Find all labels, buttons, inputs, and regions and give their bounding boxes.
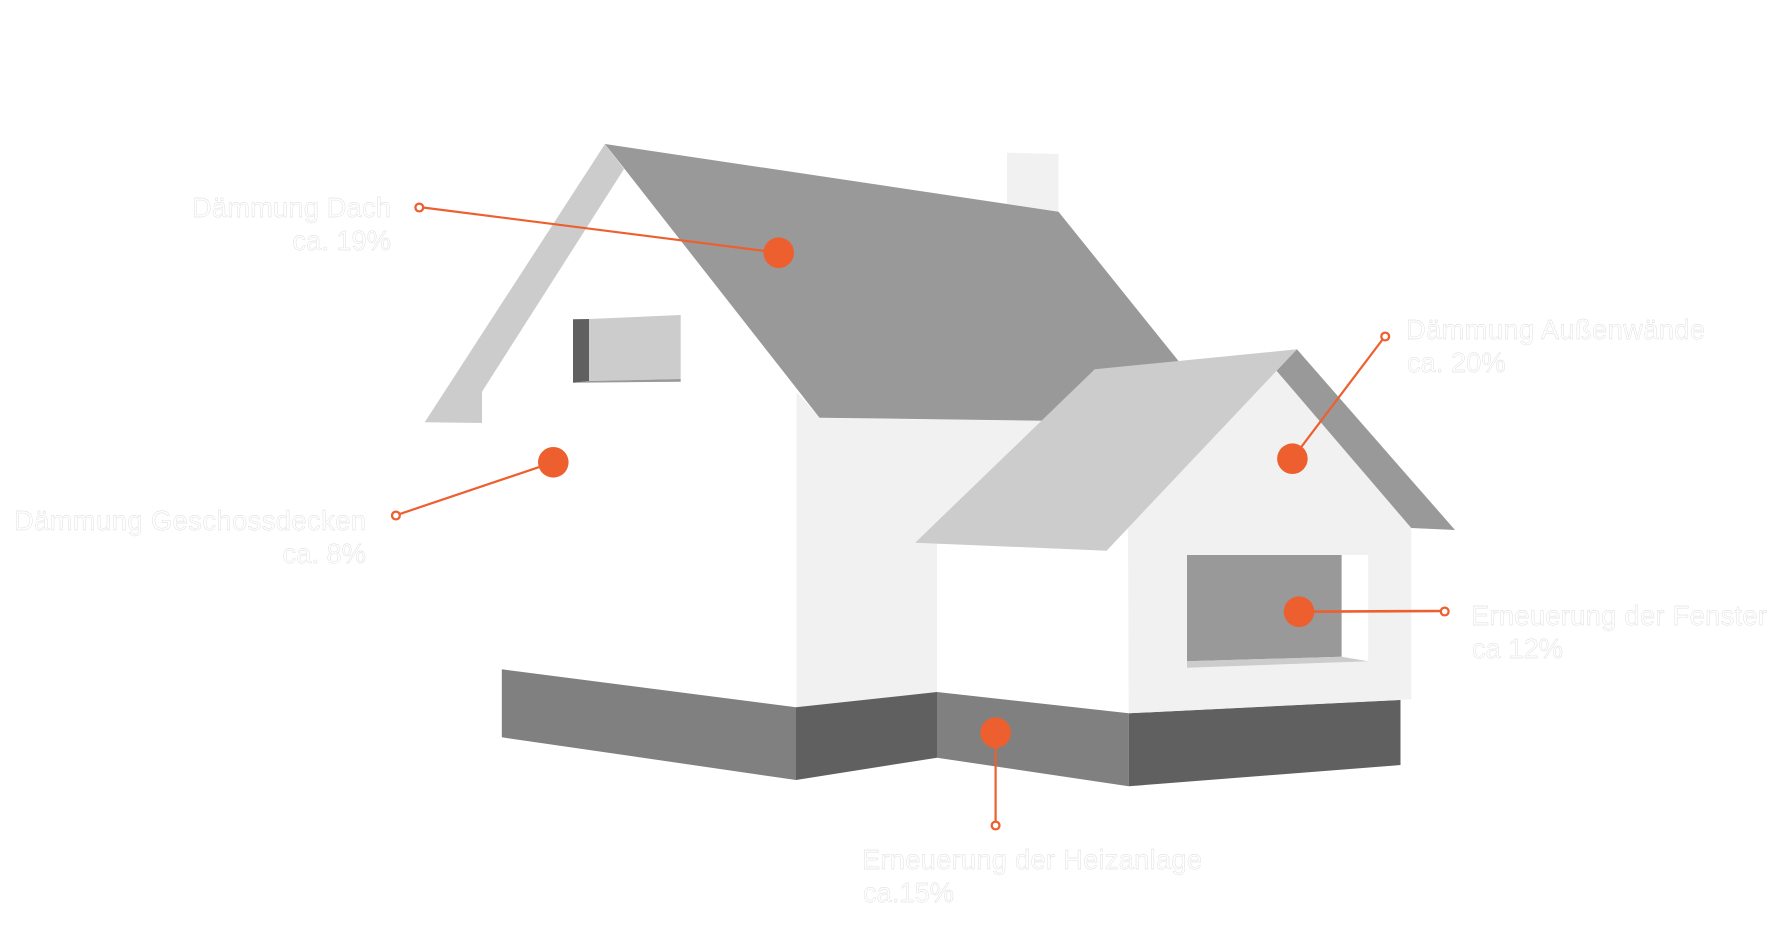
house illustration [425,144,1455,786]
callout: windows: ca 12% [1472,633,1563,664]
chimney [1007,153,1058,212]
callout: exterior wall insulation: ca. 20% [1407,347,1506,378]
callout: roof insulation [192,192,794,268]
callout: windows [1284,596,1767,664]
callout: roof insulation: ca. 19% [292,225,391,256]
callout: roof insulation: Dämmung Dach [192,192,391,223]
large window [1187,555,1368,668]
main roof gable edge [425,144,624,423]
extension roof [915,349,1297,551]
callout: exterior wall insulation [1277,314,1705,474]
callout: heating system [862,717,1202,908]
callout: heating system: ca.15% [863,877,954,908]
callout: floor ceiling insulation: ca. 8% [283,538,366,569]
callout: windows: Erneuerung der Fenster [1471,600,1767,631]
gable window [573,315,681,383]
callout: heating system: Erneuerung der Heizanlage [862,844,1202,875]
callout: floor ceiling insulation: Dämmung Geschossdecken [14,505,366,536]
callout: floor ceiling insulation [14,447,569,569]
extension roof gable edge [1276,349,1455,530]
callout: exterior wall insulation: Dämmung Außenwände [1406,314,1705,345]
plinth [502,669,1400,786]
main block side wall [796,392,1100,708]
extension front wall [1128,371,1411,713]
main roof [605,144,1178,421]
